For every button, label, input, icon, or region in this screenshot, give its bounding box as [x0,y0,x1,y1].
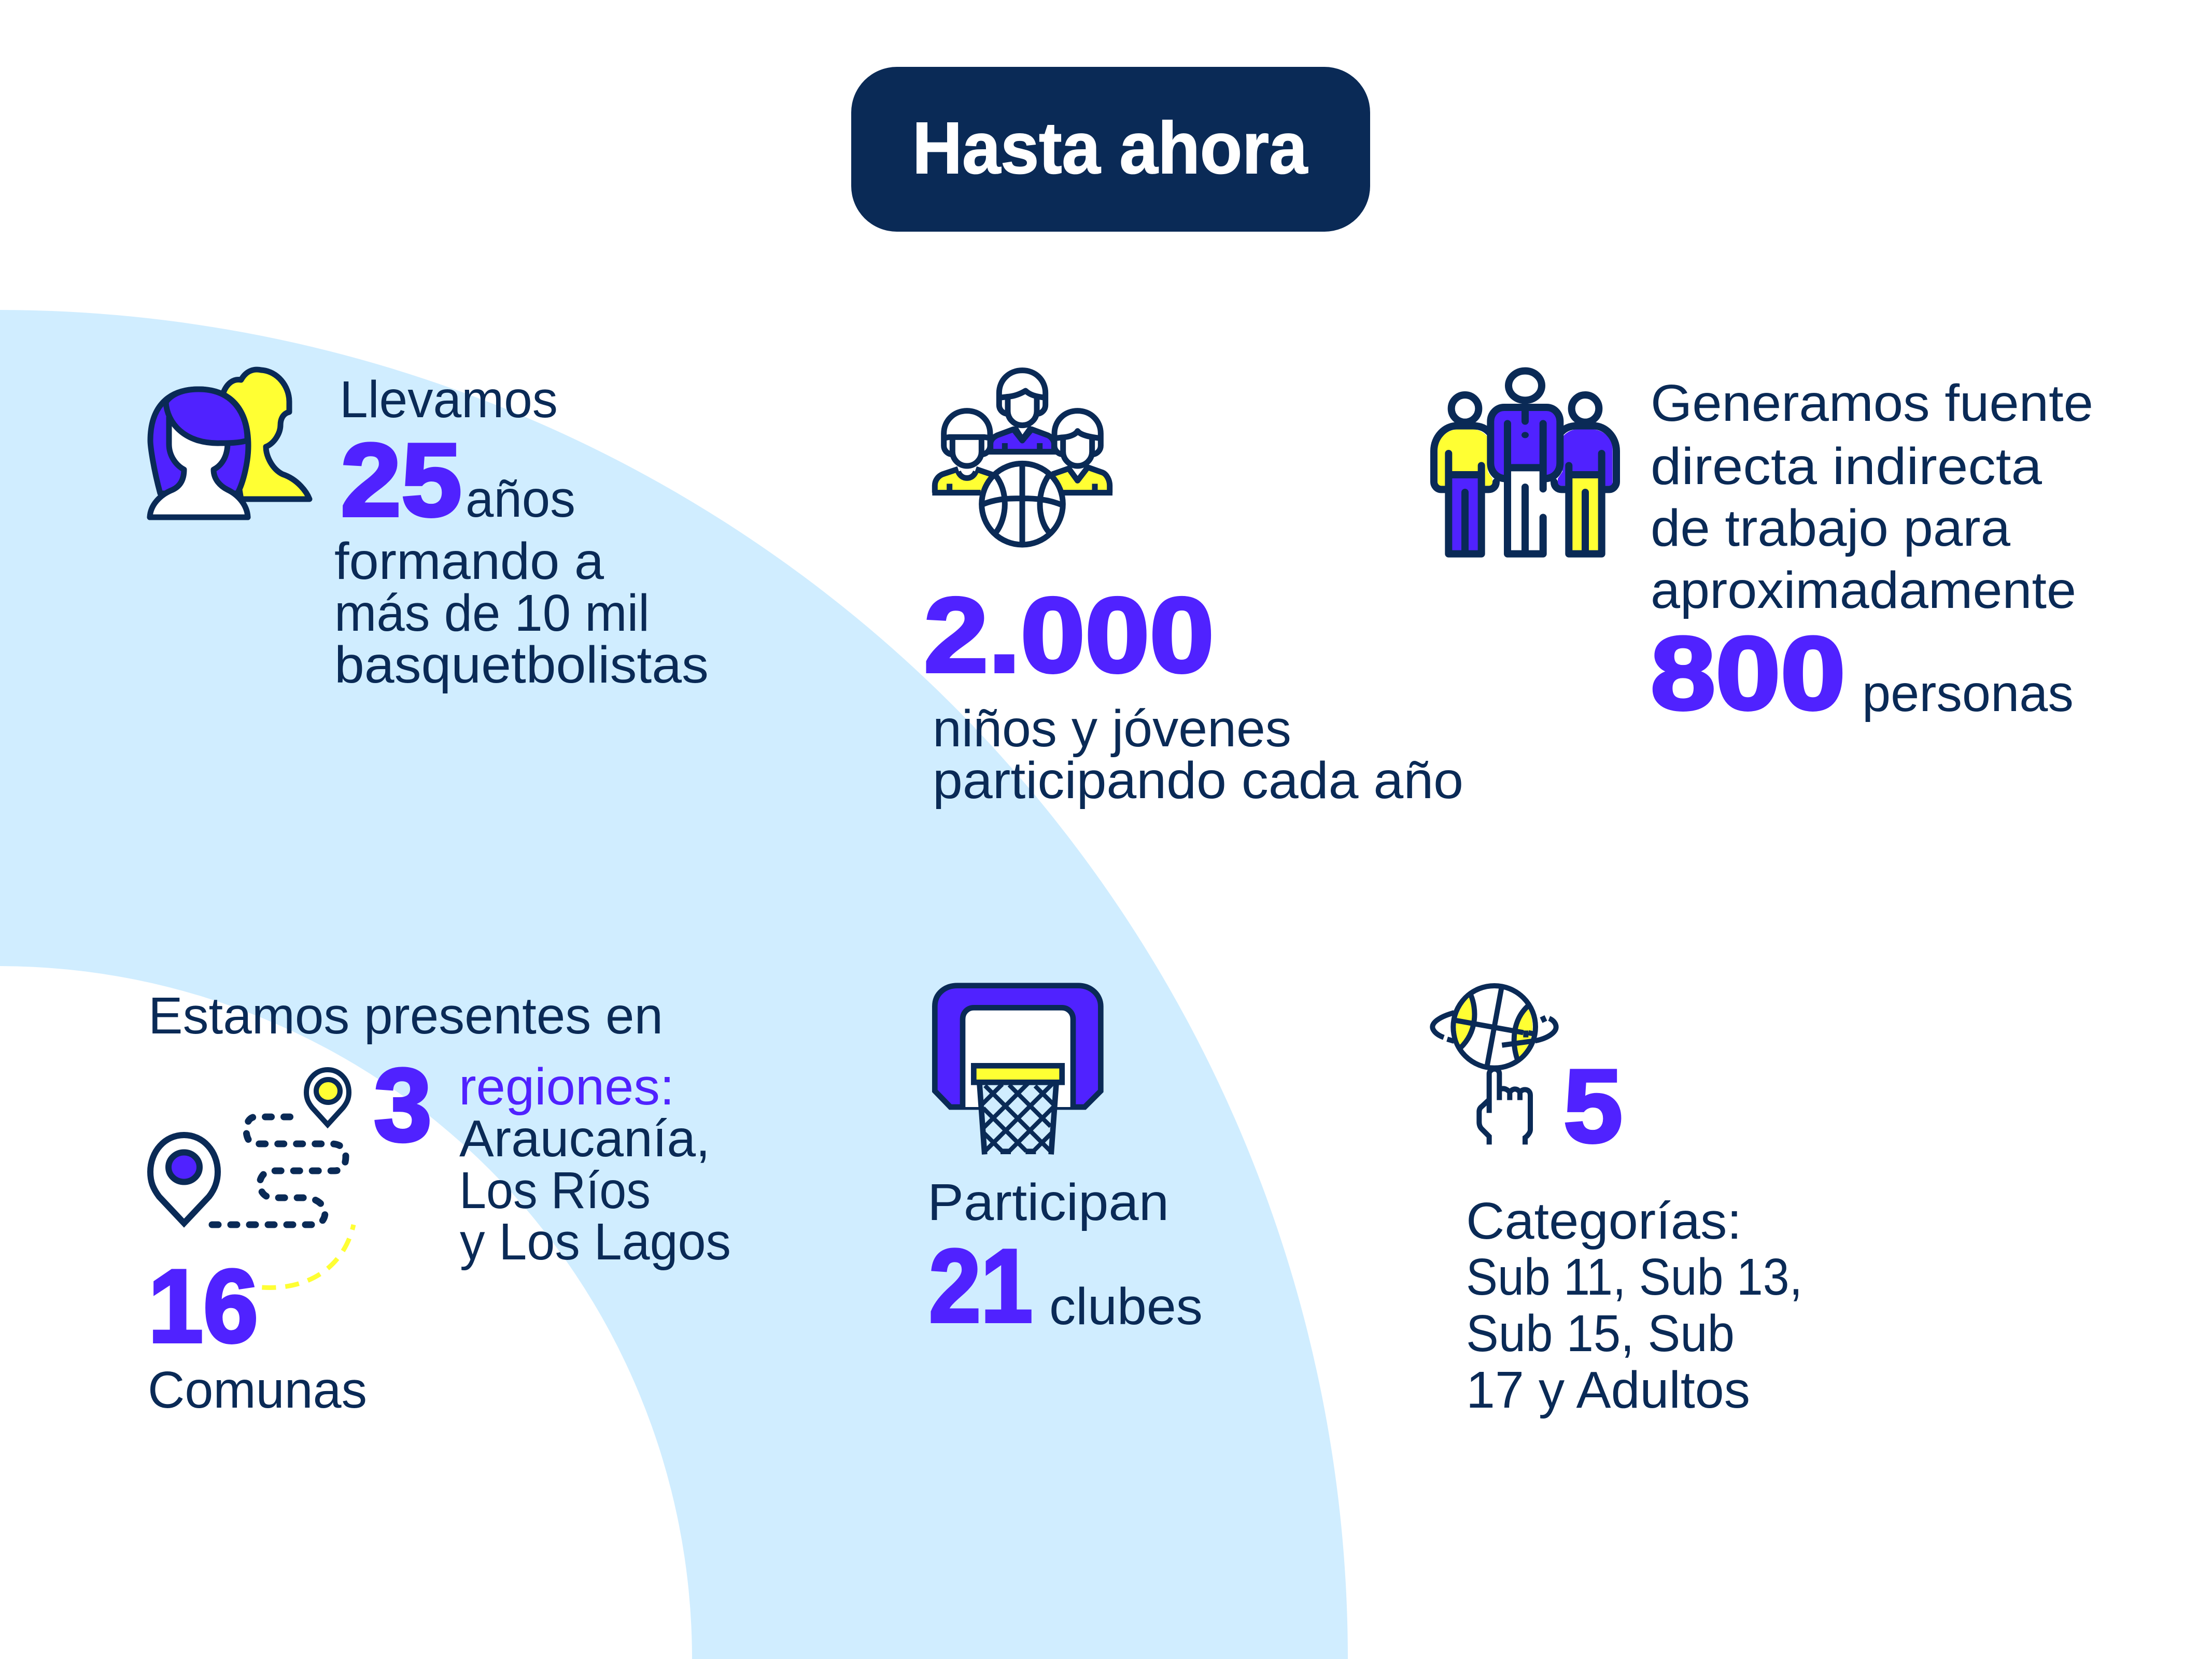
text: personas: personas [1862,664,2074,722]
panel: jobs [1434,371,2093,731]
text: niños y jóvenes participando cada año: niños y jóvenes [933,700,1291,758]
title pill: Hasta ahora [912,107,1308,189]
number: 2.000: 2.000 [924,576,1214,694]
number: 25: 25 [341,422,462,538]
panel: regions and communes [148,987,731,1419]
text: formando a más de 10 mil basquetbolistas: formando a [334,532,604,590]
left worker [1434,395,1496,554]
number: 5: 5 [1563,1048,1623,1164]
centre worker [1490,371,1560,554]
text: años: años [466,470,575,528]
right worker [1554,395,1616,554]
text: formando a más de 10 mil basquetbolistas [334,532,709,694]
text: categories list: 17 y Adultos [1466,1361,1750,1419]
text: Generamos fuente directa indirecta de trabajo para aproximadamente [1651,374,2093,619]
background quarter ring [0,310,1348,1659]
number: 16: 16 [148,1249,258,1364]
number: 800: 800 [1651,616,1845,731]
text: Generamos fuente directa indirecta de trabajo para aproximadamente: directa indirecta [1651,437,2042,495]
panel: categories [1432,986,1802,1419]
text: Generamos fuente directa indirecta de trabajo para aproximadamente: Generamos fuente [1651,374,2093,432]
icon: basketball hoop [935,986,1101,1154]
text: regiones list [459,1058,731,1271]
text: Generamos fuente directa indirecta de trabajo para aproximadamente: de trabajo para [1651,499,2010,557]
text: regiones list: Araucanía, [459,1110,710,1168]
text: formando a más de 10 mil basquetbolistas: más de 10 mil [334,584,650,642]
text: regiones list: y Los Lagos [460,1213,731,1271]
text: categories list: Categorías: [1466,1192,1742,1250]
text: niños y jóvenes participando cada año [933,700,1463,810]
text: regiones list: Los Ríos [459,1161,651,1220]
text: regiones list: regiones: [459,1058,674,1116]
text: Generamos fuente directa indirecta de trabajo para aproximadamente: aproximadamente [1651,561,2076,619]
icon: two women [150,370,309,517]
title pill [851,67,1370,232]
text: Estamos presentes en: Estamos presentes en [148,987,663,1045]
text: clubes: clubes [1049,1278,1203,1336]
panel: years of experience [150,370,709,694]
icon: three workers [1434,371,1616,554]
panel: clubs [927,986,1203,1344]
icon: three kids and basketball [932,371,1112,545]
text: Comunas: Comunas [148,1361,367,1419]
text: niños y jóvenes participando cada año: participando cada año [933,751,1463,810]
text: categories list: Sub 11, Sub 13, [1466,1248,1802,1306]
text: Participan: Participan [927,1173,1169,1231]
text: formando a más de 10 mil basquetbolistas: basquetbolistas [334,636,709,694]
icon: ball spinning on finger [1432,986,1556,1144]
text: categories list: Sub 15, Sub [1466,1304,1735,1363]
number: 21: 21 [929,1228,1033,1344]
text: categories list [1466,1192,1802,1419]
panel: children and youth [924,371,1463,810]
number: 3: 3 [374,1047,432,1163]
icon: map route with pins [150,1070,354,1287]
text: Llevamos: Llevamos [340,371,558,429]
